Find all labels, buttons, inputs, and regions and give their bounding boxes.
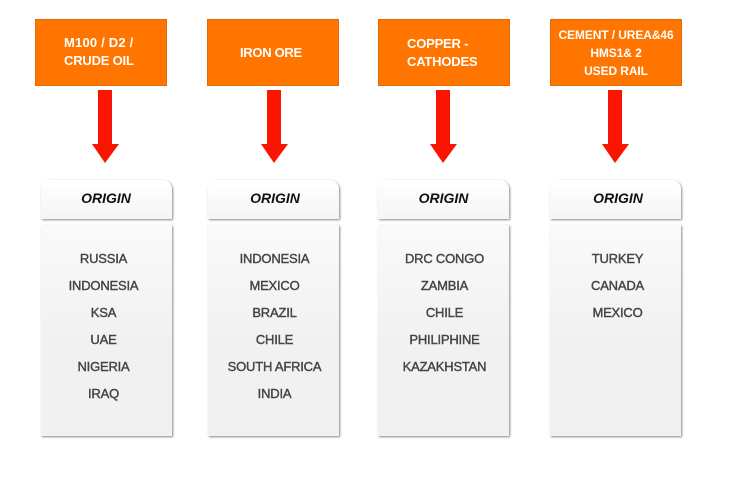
panel: origin list column 1: IRAQ [88, 386, 119, 401]
panel: origin list column 4 [550, 225, 681, 436]
panel: origin list column 3: DRC CONGO [405, 251, 484, 266]
header: origin column 3 [378, 180, 509, 219]
box: copper cathodes: COPPER - [407, 36, 468, 51]
box: M100 / D2 / crude oil [35, 19, 167, 86]
box: cement, urea, HMS, used rail: CEMENT / UREA&46 [558, 28, 674, 42]
header: origin column 2: ORIGIN [250, 190, 300, 206]
header: origin column 1: ORIGIN [81, 190, 131, 206]
header: origin column 3: ORIGIN [419, 190, 468, 206]
panel: origin list column 1: UAE [90, 332, 117, 347]
panel: origin list column 3: CHILE [426, 305, 463, 320]
header: origin column 4: ORIGIN [593, 190, 643, 206]
box: iron ore [207, 19, 339, 86]
arrow: column 4 [602, 90, 629, 163]
panel: origin list column 2 [208, 225, 339, 436]
arrow: column 3 [430, 90, 457, 163]
box: copper cathodes: CATHODES [407, 54, 477, 69]
box: M100 / D2 / crude oil: CRUDE OIL [64, 53, 134, 68]
box: cement, urea, HMS, used rail: HMS1& 2 [590, 46, 642, 60]
box: M100 / D2 / crude oil: M100 / D2 / [64, 35, 133, 50]
arrow: column 1 [92, 90, 119, 163]
panel: origin list column 2: BRAZIL [252, 305, 297, 320]
header: origin column 2 [208, 180, 339, 219]
panel: origin list column 4: MEXICO [592, 305, 643, 320]
panel: origin list column 3 [378, 225, 509, 436]
panel: origin list column 2: INDONESIA [240, 251, 309, 266]
panel: origin list column 1: INDONESIA [69, 278, 138, 293]
panel: origin list column 1: KSA [91, 305, 116, 320]
panel: origin list column 1: NIGERIA [77, 359, 130, 374]
header: origin column 4 [550, 180, 681, 219]
box: iron ore: IRON ORE [240, 45, 302, 60]
panel: origin list column 3: ZAMBIA [421, 278, 468, 293]
panel: origin list column 2: SOUTH AFRICA [228, 359, 321, 374]
box: copper cathodes [378, 19, 510, 86]
box: cement, urea, HMS, used rail [550, 19, 682, 86]
panel: origin list column 2: MEXICO [249, 278, 300, 293]
panel: origin list column 4: CANADA [591, 278, 644, 293]
panel: origin list column 3: KAZAKHSTAN [403, 359, 486, 374]
panel: origin list column 2: CHILE [256, 332, 293, 347]
arrow: column 2 [261, 90, 288, 163]
box: cement, urea, HMS, used rail: USED RAIL [584, 64, 648, 78]
panel: origin list column 1 [41, 225, 172, 436]
header: origin column 1 [41, 180, 172, 219]
panel: origin list column 2: INDIA [258, 386, 291, 401]
panel: origin list column 4: TURKEY [592, 251, 643, 266]
panel: origin list column 1: RUSSIA [80, 251, 127, 266]
panel: origin list column 3: PHILIPHINE [409, 332, 480, 347]
